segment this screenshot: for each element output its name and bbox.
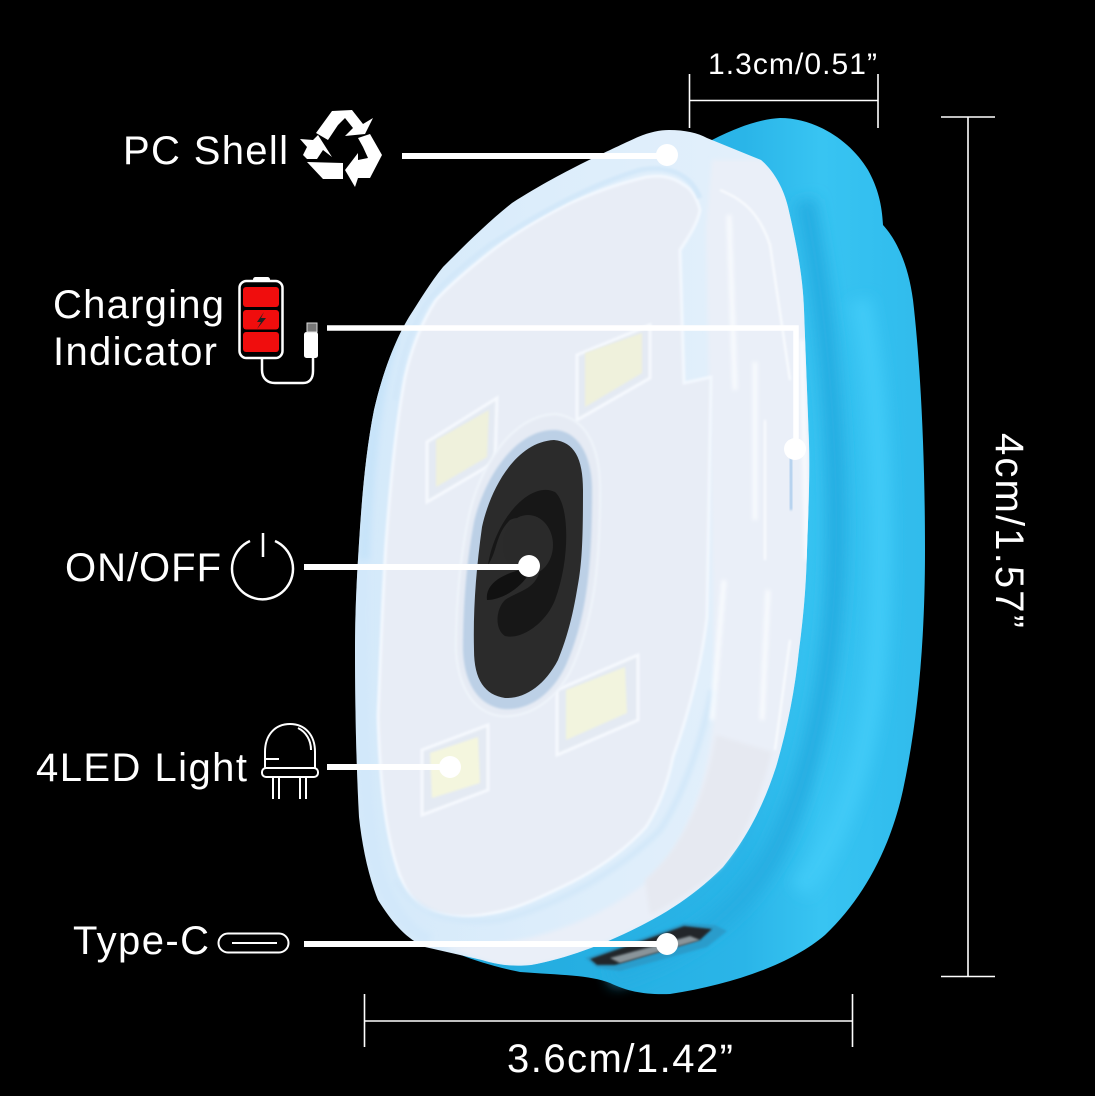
type-c port (585, 923, 727, 971)
dimension: width 3.6cm/1.42" (364, 994, 852, 1081)
blue silicone back (450, 118, 925, 994)
callout: 4LED Light (36, 724, 461, 799)
icon: battery with cable (240, 277, 318, 383)
dimension: width 1.3cm/0.51" (689, 48, 878, 128)
callout: 4LED Light: 4LED Light (36, 746, 247, 790)
dot (518, 555, 540, 577)
callout: ON/OFF: ON/OFF (65, 546, 221, 590)
icon: power (232, 533, 293, 599)
callout: Charging Indicator (53, 277, 806, 460)
callout: Type-C: Type-C (73, 919, 209, 963)
dimension: height 4cm/1.57": 4cm/1.57” (987, 433, 1031, 628)
leader line (304, 564, 529, 570)
dot (784, 438, 806, 460)
leader line (327, 328, 796, 449)
LED: top left (427, 398, 497, 502)
white side wall (440, 160, 809, 966)
translucent PC shell (355, 130, 809, 966)
dot (439, 756, 461, 778)
LED: top right (577, 325, 650, 420)
callout: Charging Indicator: Charging (53, 283, 224, 327)
soft rim bands (362, 168, 807, 940)
callout: Charging Indicator: Indicator (53, 330, 217, 374)
dimension: height 4cm/1.57" (941, 117, 1031, 976)
product: clip light (355, 118, 925, 994)
leader line (304, 941, 667, 947)
icon: USB-C port (218, 934, 288, 952)
LED: bottom right (557, 655, 638, 755)
callout: PC Shell: PC Shell (123, 129, 288, 173)
dimension: width 3.6cm/1.42": 3.6cm/1.42” (507, 1037, 733, 1081)
power button (456, 414, 600, 716)
side wall ridges (712, 215, 807, 720)
dot (656, 933, 678, 955)
dimension: width 1.3cm/0.51": 1.3cm/0.51” (708, 48, 877, 81)
blue ridge shading (610, 200, 836, 975)
lower side shade (645, 735, 772, 915)
icon: LED diode (262, 724, 318, 799)
LED: bottom left (422, 725, 488, 815)
leader line (402, 153, 667, 159)
inner face panel (378, 176, 711, 916)
blue highlight (800, 300, 880, 890)
callout: ON/OFF (65, 533, 540, 599)
callout: PC Shell (123, 110, 678, 187)
button swirl (488, 490, 566, 637)
callout: Type-C (73, 919, 678, 963)
leader line (327, 764, 450, 770)
dot (656, 144, 678, 166)
icon: recycling (300, 110, 382, 187)
